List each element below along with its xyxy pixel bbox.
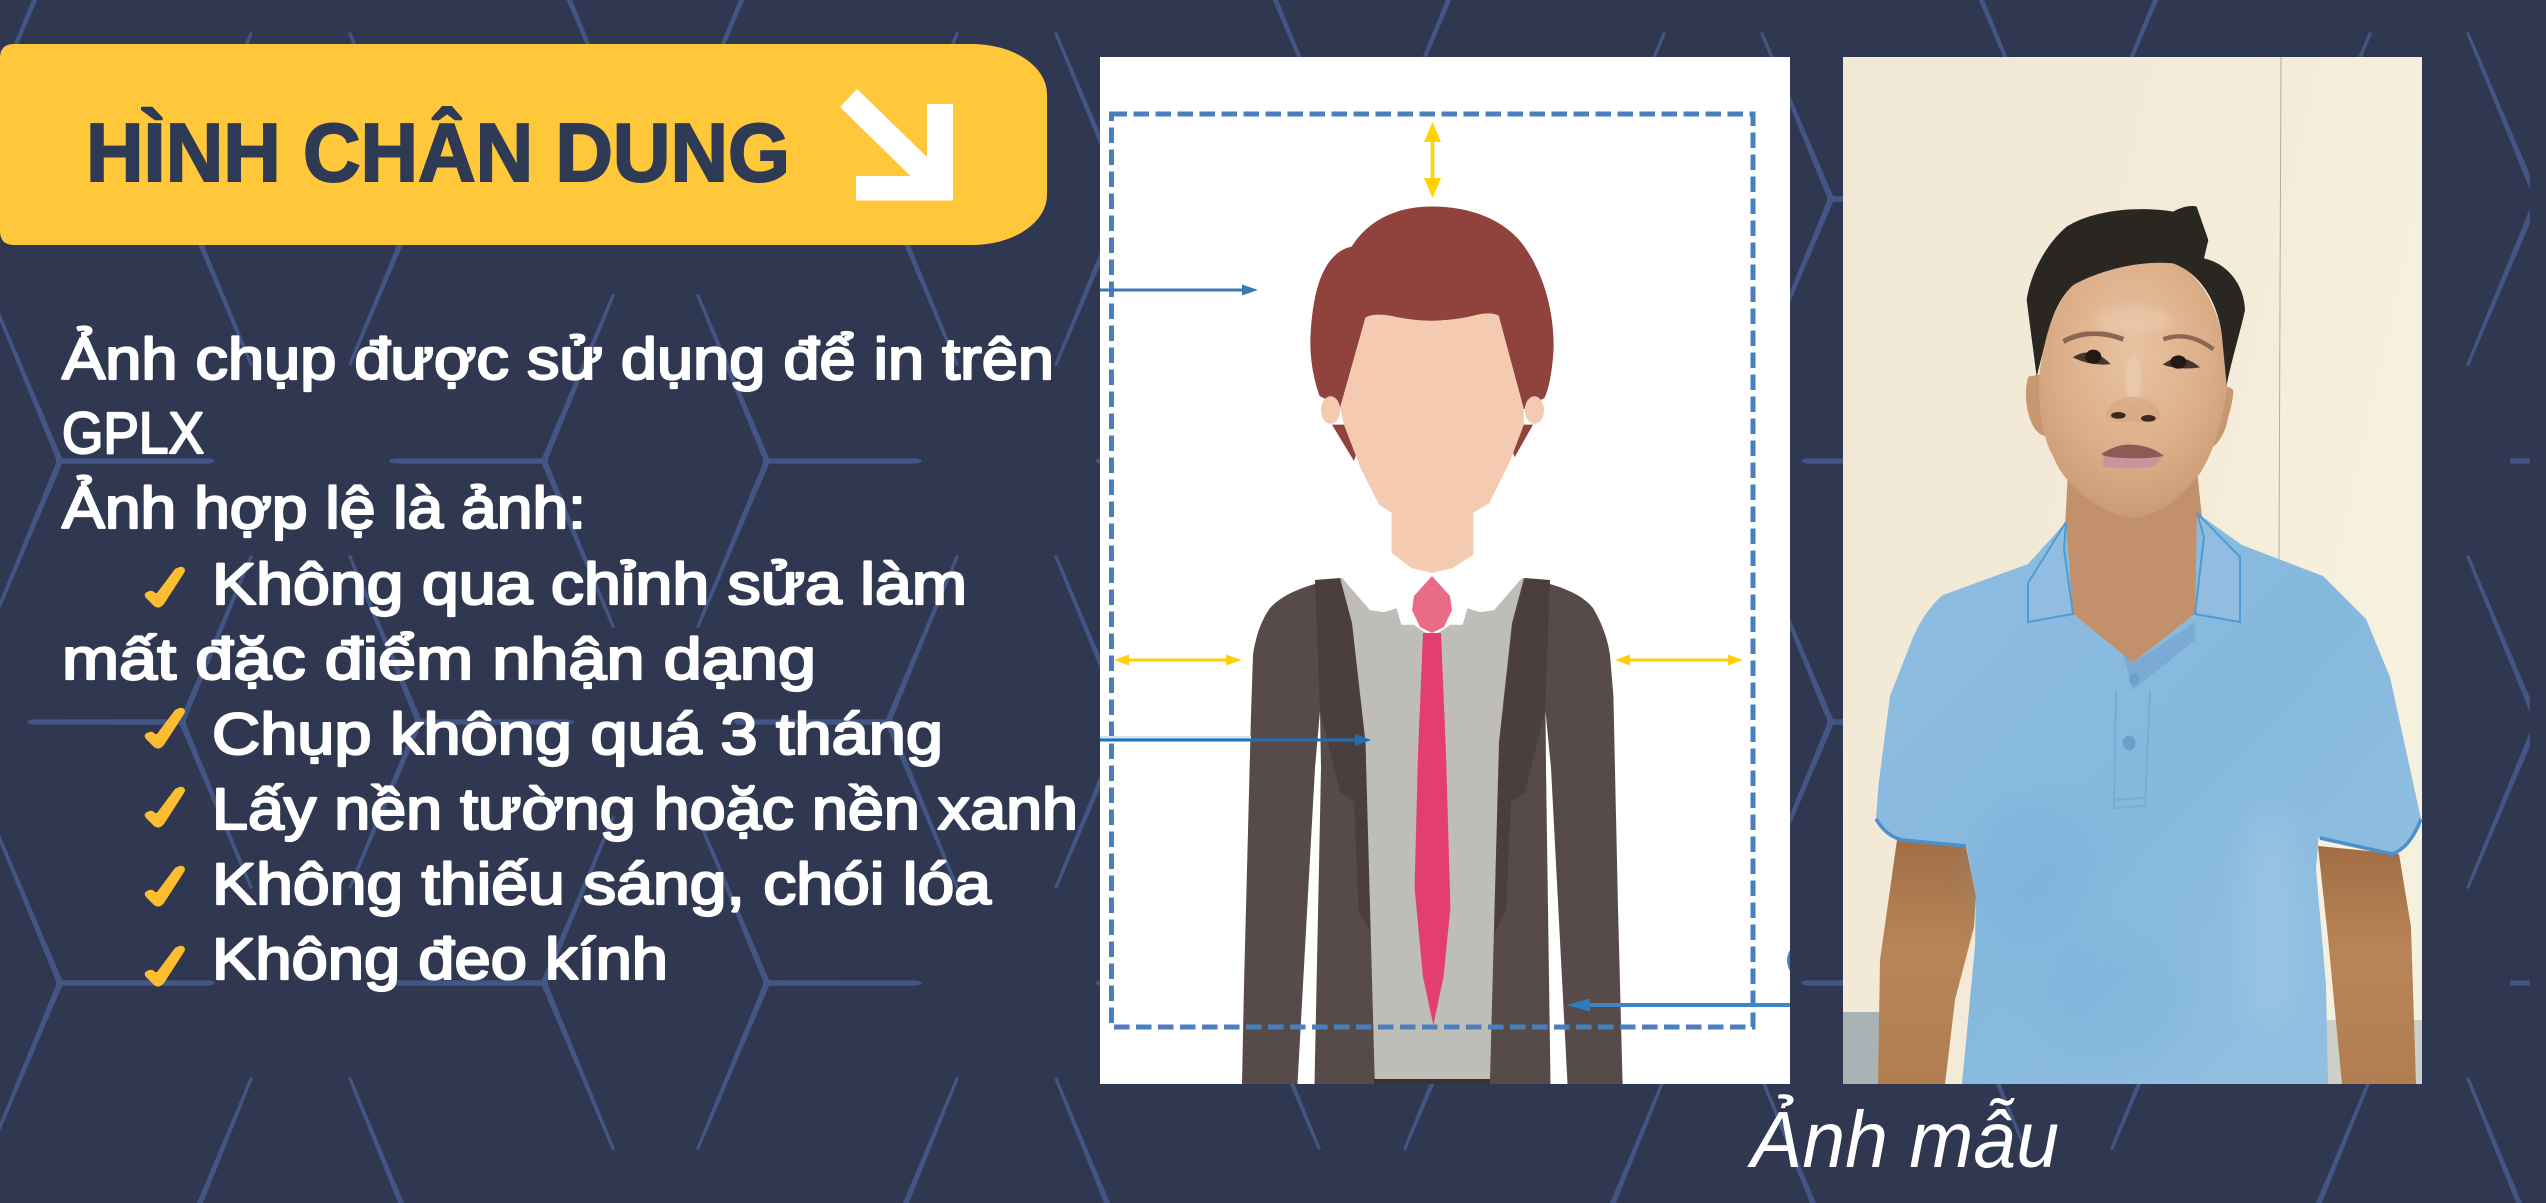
icon: arrow down-right <box>840 89 953 200</box>
arrow: left yellow double arrow <box>1114 654 1242 666</box>
arrow: blue pointer to background <box>1100 284 1258 296</box>
text block: photo requirements: Không thiếu sáng, chói lóa <box>212 852 992 917</box>
photo: polo shirt <box>1876 513 2421 1084</box>
text block: photo requirements: Ảnh chụp được sử dụng để in trên <box>62 327 1054 392</box>
banner shape <box>0 44 1047 245</box>
caption: sample photo: Ảnh mẫu <box>1747 1094 2059 1184</box>
text block: photo requirements: Chụp không quá 3 tháng <box>212 702 943 767</box>
dashed crop frame <box>1112 114 1753 1027</box>
photo: wall <box>1843 57 2422 1084</box>
text block: photo requirements: Không đeo kính <box>212 927 668 992</box>
arrow: blue pointer to shirt <box>1100 734 1371 746</box>
figure: collar <box>1340 576 1524 637</box>
icons: yellow check marks <box>145 567 185 987</box>
title banner <box>0 44 1047 245</box>
panel: sample photo <box>1843 57 2422 1084</box>
figure: head <box>1310 206 1554 573</box>
panel: portrait guide diagram <box>1100 57 1790 1084</box>
text block: photo requirements: Không qua chỉnh sửa làm <box>212 552 967 617</box>
text block: photo requirements: Ảnh hợp lệ là ảnh: <box>62 476 586 541</box>
arrow: blue pointer to jacket <box>1566 950 1790 1012</box>
photo: head <box>2026 206 2245 518</box>
arrow: top yellow double arrow <box>1424 122 1441 198</box>
text block: photo requirements: Lấy nền tường hoặc nền xanh <box>212 777 1078 842</box>
figure: tie <box>1412 576 1452 1025</box>
photo: neck <box>2064 470 2204 663</box>
photo: arms <box>1878 840 2416 1084</box>
text block: photo requirements: mất đặc điểm nhận dạng <box>62 627 816 692</box>
title text: HÌNH CHÂN DUNG <box>86 106 790 199</box>
text block: photo requirements <box>62 327 1078 992</box>
arrow: right yellow double arrow <box>1615 654 1743 666</box>
figure: suit body <box>1242 578 1623 1084</box>
text block: photo requirements: GPLX <box>62 401 204 466</box>
